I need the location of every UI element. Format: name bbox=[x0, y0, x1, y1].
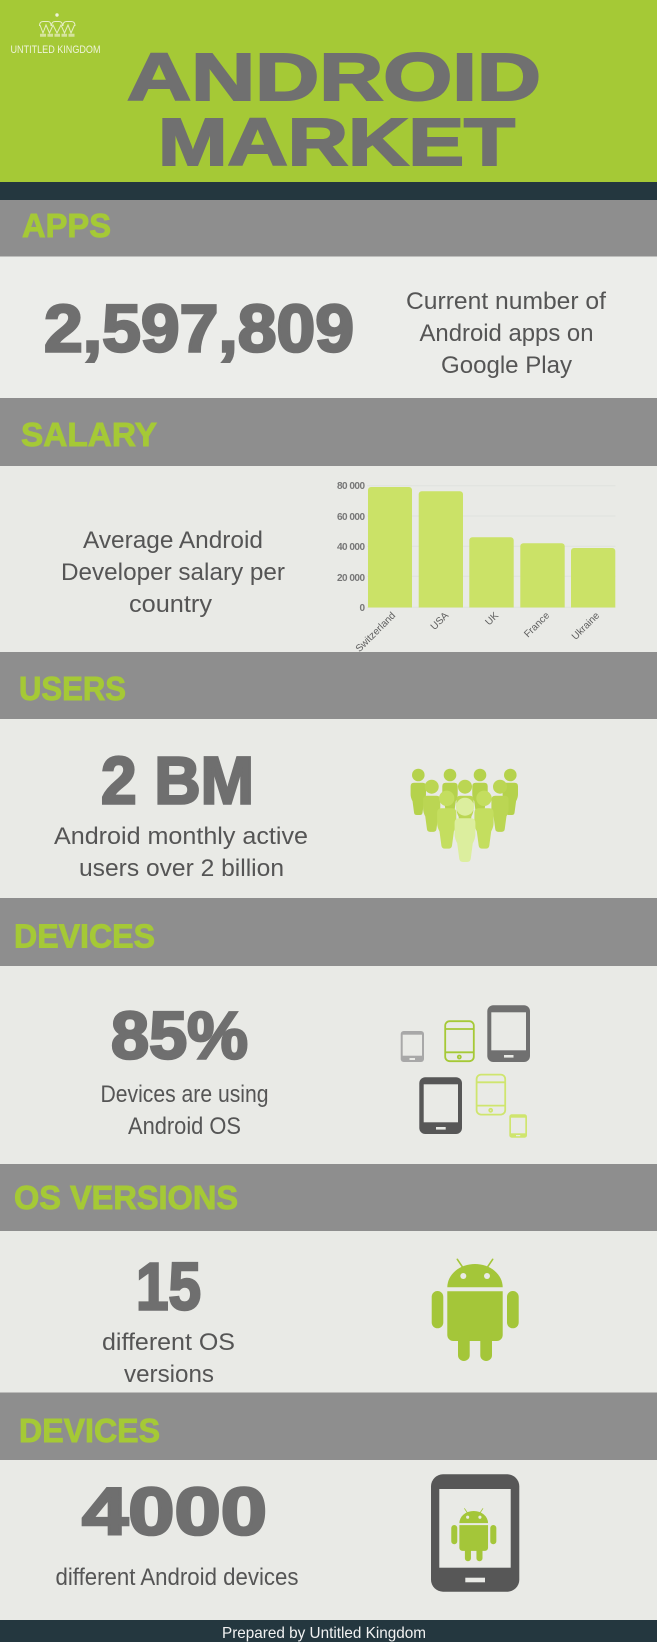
small gray phone bbox=[401, 1031, 424, 1062]
third row people bbox=[437, 791, 494, 849]
tablet body bbox=[431, 1474, 519, 1592]
device count number: 4000 bbox=[82, 1474, 267, 1550]
salary heading: SALARY bbox=[21, 416, 157, 453]
users heading: USERS bbox=[19, 670, 126, 707]
os versions heading: OS VERSIONS bbox=[14, 1179, 238, 1216]
chart x axis labels bbox=[354, 610, 602, 655]
apps description: Android apps on bbox=[420, 320, 594, 347]
chart x axis labels: Ukraine bbox=[570, 610, 602, 642]
chart x axis labels: USA bbox=[429, 610, 451, 633]
icon: group of people bbox=[411, 769, 518, 862]
panel: devices share bbox=[0, 898, 657, 1140]
devices description bbox=[100, 1081, 268, 1140]
apps description bbox=[406, 288, 606, 379]
panel: salary bbox=[0, 398, 657, 655]
icon: crown bbox=[40, 13, 75, 35]
salary description bbox=[61, 527, 285, 618]
apps description: Google Play bbox=[441, 352, 572, 379]
os versions band bbox=[0, 1164, 657, 1231]
small light green phone bbox=[509, 1114, 527, 1138]
title bbox=[127, 40, 541, 180]
title line 2: MARKET bbox=[158, 105, 515, 180]
devices number: 85% bbox=[111, 998, 248, 1074]
chart gridlines bbox=[367, 486, 616, 607]
chart y axis labels bbox=[337, 481, 365, 614]
panel: apps bbox=[0, 200, 657, 398]
users description bbox=[54, 823, 308, 882]
chart y axis labels: 40 000 bbox=[337, 542, 365, 553]
os versions description bbox=[102, 1329, 235, 1388]
users description: Android monthly active bbox=[54, 823, 308, 850]
footer background bbox=[0, 1620, 657, 1642]
light green outline tablet bbox=[477, 1075, 505, 1115]
chart x axis labels: Switzerland bbox=[354, 610, 398, 655]
apps heading: APPS bbox=[22, 207, 111, 244]
logo text: UNTITLED KINGDOM bbox=[10, 44, 100, 56]
devices heading: DEVICES bbox=[14, 918, 155, 954]
salary band bbox=[0, 398, 657, 466]
os versions description: different OS bbox=[102, 1329, 235, 1356]
devices description: Devices are using bbox=[100, 1081, 268, 1108]
dark stripe bbox=[0, 182, 657, 200]
chart x axis labels: France bbox=[522, 610, 552, 640]
icon: tablet with android robot bbox=[431, 1474, 519, 1592]
devices description: Android OS bbox=[128, 1113, 241, 1140]
os versions description: versions bbox=[124, 1361, 214, 1388]
header panel bbox=[0, 0, 657, 200]
chart y axis labels: 80 000 bbox=[337, 481, 365, 492]
tablet button bbox=[465, 1578, 485, 1582]
footer text: Prepared by Untitled Kingdom bbox=[222, 1625, 426, 1642]
salary description: Developer salary per bbox=[61, 559, 285, 586]
large dark tablet bbox=[419, 1077, 462, 1134]
logo: Untitled Kingdom bbox=[10, 13, 100, 56]
chart y axis labels: 60 000 bbox=[337, 512, 365, 523]
apps number: 2,597,809 bbox=[44, 292, 354, 366]
large gray tablet bbox=[487, 1005, 530, 1062]
devices band bbox=[0, 898, 657, 966]
icon: android robot bbox=[432, 1259, 519, 1361]
device count band bbox=[0, 1392, 657, 1460]
front person bbox=[455, 798, 475, 862]
apps body background bbox=[0, 256, 657, 398]
title line 1: ANDROID bbox=[127, 40, 541, 115]
chart y axis labels: 0 bbox=[359, 603, 365, 614]
tablet screen bbox=[439, 1489, 511, 1568]
back row people bbox=[411, 769, 518, 815]
apps description: Current number of bbox=[406, 288, 606, 315]
os versions number: 15 bbox=[136, 1250, 201, 1324]
small android robot bbox=[451, 1509, 496, 1561]
green outline tablet bbox=[445, 1021, 474, 1061]
icon: assorted devices bbox=[401, 1005, 530, 1138]
salary description: country bbox=[129, 591, 212, 618]
users number: 2 BM bbox=[101, 744, 254, 818]
panel: os versions bbox=[0, 1164, 657, 1388]
apps band bbox=[0, 200, 657, 256]
device count heading: DEVICES bbox=[19, 1412, 160, 1449]
panel: device count bbox=[0, 1392, 657, 1592]
salary description: Average Android bbox=[83, 527, 263, 554]
footer bbox=[0, 1620, 657, 1642]
second row people bbox=[423, 780, 509, 832]
device count description: different Android devices bbox=[56, 1564, 298, 1591]
header green background bbox=[0, 0, 657, 182]
users band bbox=[0, 652, 657, 719]
users description: users over 2 billion bbox=[79, 855, 284, 882]
chart y axis labels: 20 000 bbox=[337, 573, 365, 584]
bar chart: salary per country bbox=[337, 481, 616, 655]
chart x axis labels: UK bbox=[484, 610, 501, 628]
chart bars bbox=[368, 487, 615, 608]
panel: users bbox=[0, 652, 657, 882]
